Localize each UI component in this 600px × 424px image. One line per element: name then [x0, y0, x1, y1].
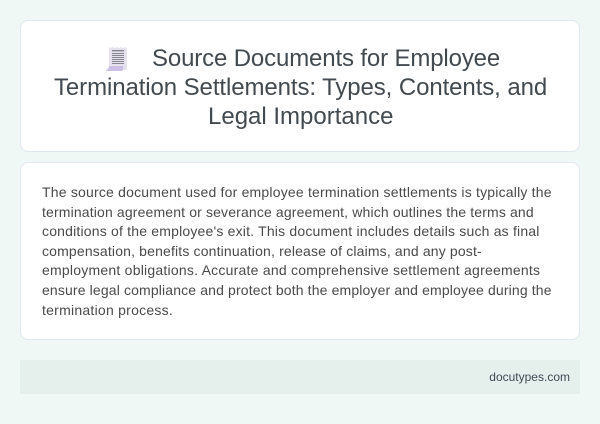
text block: description: termination agreement or severance agreement, which outlines the terms and [42, 204, 534, 220]
title: Legal Importance [208, 103, 393, 130]
text block: description: compensation, benefits continuation, release of claims, and any post- [42, 243, 482, 259]
panel: description card [20, 162, 580, 340]
icon: document receipt [106, 47, 127, 71]
footer bar [20, 360, 580, 394]
footer text: docutypes.com [489, 370, 570, 384]
text block: description: ensure legal compliance and protect both the employer and employee during the [42, 282, 552, 298]
text block: description: The source document used for employee termination settlements is typically the [42, 184, 552, 200]
text block: description [42, 184, 552, 318]
title [54, 45, 547, 130]
panel: title card [20, 20, 580, 152]
text block: description: termination process. [42, 302, 173, 318]
text block: description: employment obligations. Accurate and comprehensive settlement agreements [42, 262, 540, 278]
text block: description: conditions of the employee's exit. This document includes details such as final [42, 223, 540, 239]
title: Termination Settlements: Types, Contents, and [54, 74, 547, 101]
title: Source Documents for Employee [152, 45, 500, 72]
